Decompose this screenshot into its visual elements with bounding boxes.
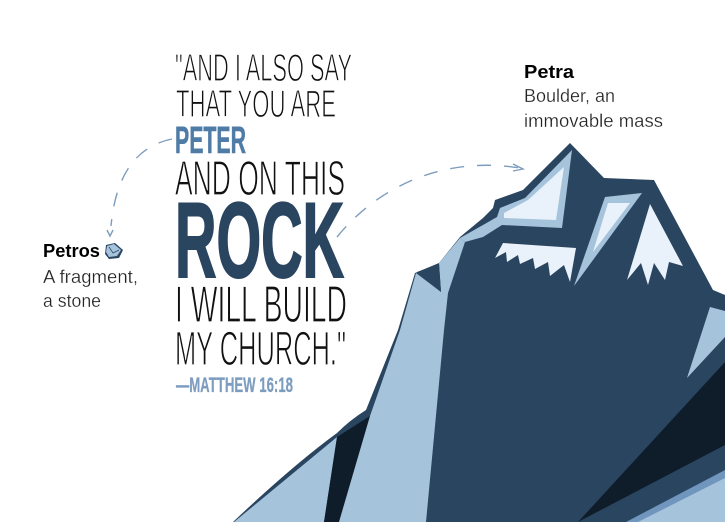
right dark wedge: [578, 362, 725, 522]
mountain silhouette: [233, 143, 725, 522]
label: Petra: Boulder, an: [524, 86, 615, 106]
label: Petros: a stone: [43, 291, 101, 311]
citation: —MATTHEW 16:18: [176, 374, 293, 397]
quote line 5: MY CHURCH.": [175, 323, 346, 376]
label: Petra: [524, 62, 663, 131]
ridge shadow triangle: [417, 264, 441, 292]
label: Petra: Petra: [524, 62, 575, 82]
arrow: Peter to Petros: [107, 139, 172, 236]
right light facet: [687, 307, 725, 378]
label: Petros: Petros: [43, 241, 100, 261]
label: Petra: immovable mass: [524, 111, 663, 131]
quote line 4: I WILL BUILD: [175, 276, 347, 334]
quote line 3: AND ON THIS: [175, 152, 345, 206]
lower left rock face: [234, 437, 337, 522]
quote line 1: "AND I ALSO SAY: [175, 47, 352, 90]
Rock: ROCK: [175, 180, 344, 300]
quote: [175, 47, 352, 397]
dark crevice: [324, 416, 370, 522]
right snow patch: [627, 204, 683, 285]
main light rock face: [339, 238, 465, 522]
right light strip: [638, 478, 725, 522]
ridge highlight band: [460, 150, 572, 242]
center crevasse snow: [593, 203, 630, 252]
label: Petros: A fragment,: [43, 267, 138, 287]
label: Petros: [43, 241, 138, 311]
mountain illustration: [233, 143, 725, 522]
left snow patch: [495, 243, 576, 282]
peak snow: [504, 167, 564, 220]
arrow: Rock to Petra: [337, 164, 523, 237]
center crevasse: [574, 193, 642, 286]
right mid-blue strip: [626, 470, 725, 522]
quote line 2: THAT YOU ARE: [176, 83, 336, 126]
icon: stone: [105, 243, 123, 259]
Peter: PETER: [175, 120, 246, 162]
